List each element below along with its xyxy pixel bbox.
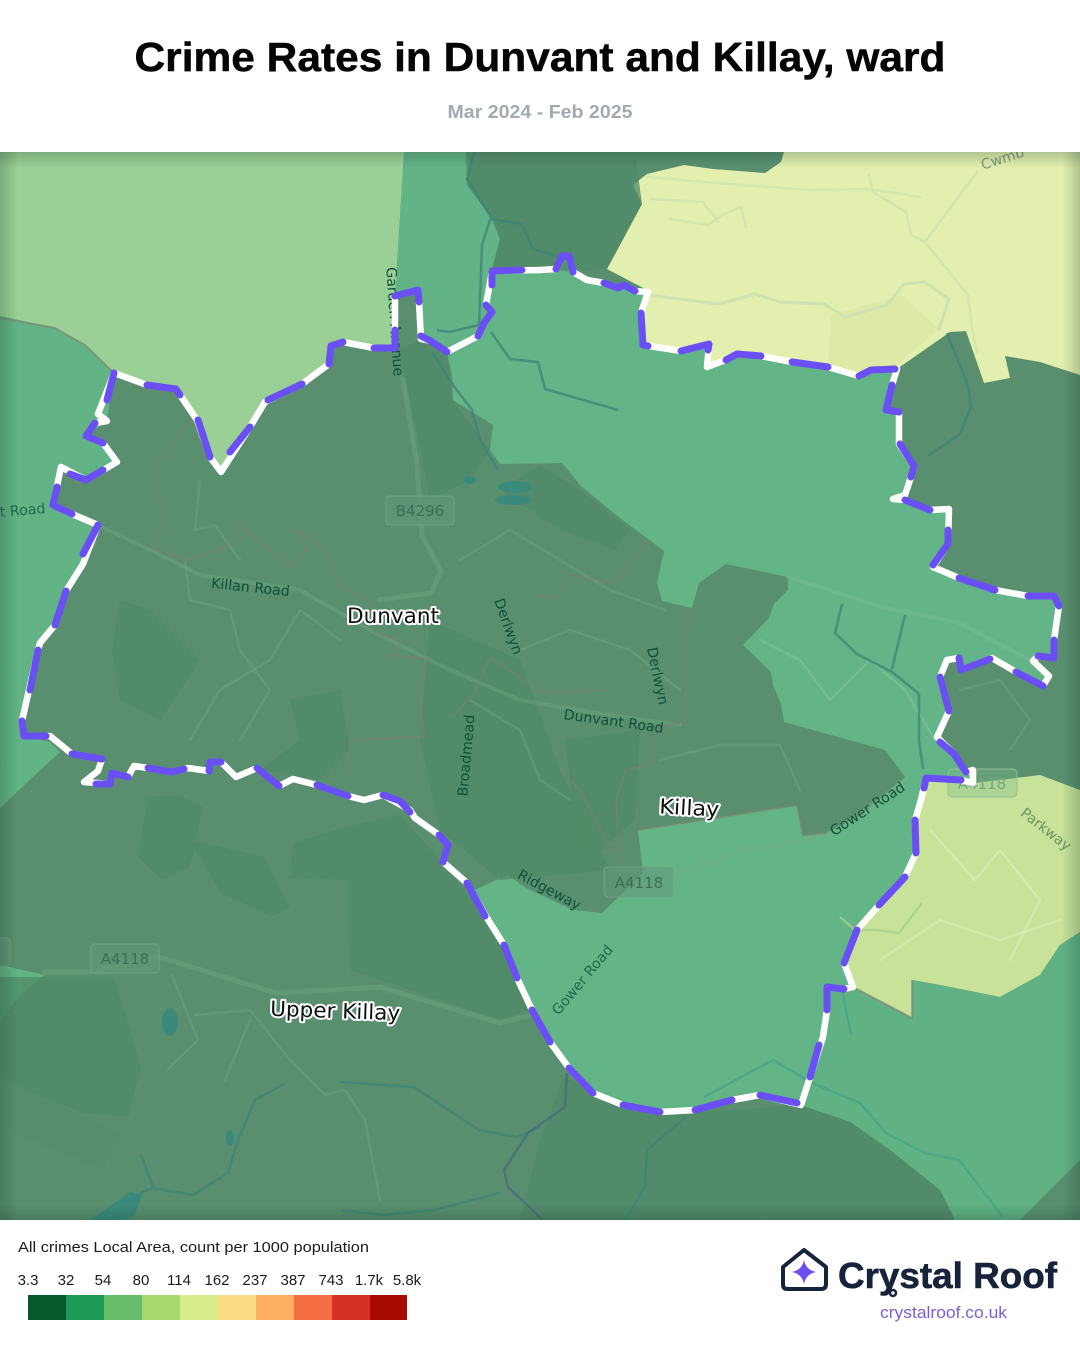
map base: dark green areas xyxy=(0,152,1080,1220)
shield A4118 centre: A4118 xyxy=(615,874,663,892)
label Derlwyn east: Derlwyn xyxy=(643,646,671,706)
place label Upper Killay: Upper Killay xyxy=(270,997,401,1025)
legend scale labels: 5.8k xyxy=(393,1272,422,1289)
place label Killay: Killay xyxy=(659,794,720,822)
legend scale labels: 3.3 xyxy=(18,1272,38,1289)
legend title: All crimes Local Area, count per 1000 population xyxy=(18,1239,369,1256)
label Parkway: Parkway xyxy=(1017,805,1074,854)
legend xyxy=(18,1239,422,1320)
legend scale labels: 54 xyxy=(95,1272,111,1289)
area: pale yellow darker field xyxy=(828,295,939,376)
icon: house with star xyxy=(783,1250,826,1289)
road labels xyxy=(0,145,1074,1018)
legend scale labels: 80 xyxy=(133,1272,149,1289)
label Road clipped west: t Road xyxy=(0,501,46,521)
legend scale labels: 387 xyxy=(280,1272,306,1289)
label Dunvant Road: Dunvant Road xyxy=(563,707,665,737)
road shields xyxy=(0,496,1017,973)
legend scale labels xyxy=(18,1272,422,1289)
place label Dunvant: Dunvant xyxy=(347,604,439,628)
area: light green north-west xyxy=(0,152,404,472)
legend scale labels: 743 xyxy=(318,1272,344,1289)
area: mid green central and south xyxy=(447,256,1059,1112)
woodland patches xyxy=(0,160,955,1220)
shield A4118 west xyxy=(91,944,159,973)
title: Crime Rates in Dunvant and Killay, ward xyxy=(134,34,946,80)
label Derlwyn west: Derlwyn xyxy=(490,596,525,657)
shield B4296: B4296 xyxy=(396,502,444,520)
purple dashes xyxy=(22,256,1059,1112)
legend scale labels: 1.7k xyxy=(355,1272,384,1289)
area: yellow-green south-east xyxy=(844,775,1080,1018)
shield A4118 east: A4118 xyxy=(958,775,1006,793)
legend colour bar xyxy=(28,1295,407,1320)
brand name: Crystal Roof xyxy=(838,1255,1058,1296)
icon: y tail ring xyxy=(890,1290,896,1296)
shield B4296 xyxy=(386,496,454,525)
ponds xyxy=(90,476,532,1220)
legend scale labels: 162 xyxy=(204,1272,230,1289)
legend scale labels: 237 xyxy=(242,1272,268,1289)
ward boundaries xyxy=(0,318,912,1018)
shield A4118 west: A4118 xyxy=(101,950,149,968)
label Gower Road north: Gower Road xyxy=(827,780,908,840)
shield edge west xyxy=(0,938,10,966)
shield A4118 centre xyxy=(604,867,673,897)
label Garden Avenue: Garden Avenue xyxy=(382,267,406,377)
label Cwm clipped top right: Cwmb xyxy=(979,145,1026,174)
area: pale yellow north-east xyxy=(607,152,1080,383)
area: mid green south-east xyxy=(801,932,1080,1220)
area: mid green small west wedge xyxy=(0,965,45,1006)
brand url: crystalroof.co.uk xyxy=(880,1304,1008,1322)
legend scale labels: 114 xyxy=(167,1272,191,1289)
local roads xyxy=(45,172,1060,1200)
rivers xyxy=(100,152,1003,1220)
brand logo xyxy=(783,1250,1058,1322)
label Broadmead: Broadmead xyxy=(455,714,479,797)
area: mid green strip xyxy=(395,152,500,352)
label Ridgeway: Ridgeway xyxy=(515,867,583,914)
choropleth map xyxy=(0,145,1080,1220)
subtitle: date range: Mar 2024 - Feb 2025 xyxy=(448,102,632,122)
area: mid green west xyxy=(0,316,117,808)
shield A4118 east xyxy=(948,769,1017,797)
map edge vignette xyxy=(0,152,1080,1220)
ward outline: white and purple dashed xyxy=(22,256,1059,1112)
label Gower Road south: Gower Road xyxy=(549,942,617,1018)
legend scale labels: 32 xyxy=(58,1272,74,1289)
label Killan Road: Killan Road xyxy=(210,576,291,600)
